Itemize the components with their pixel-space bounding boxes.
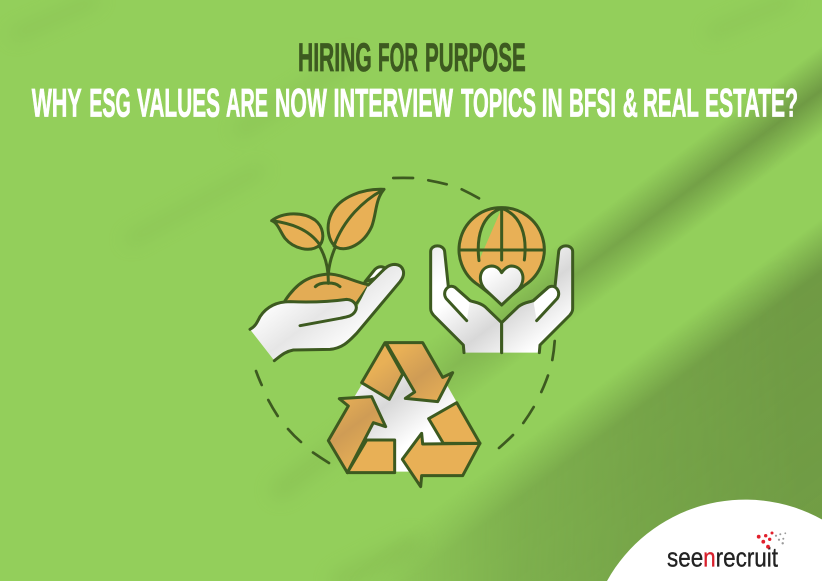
left hand: [431, 246, 502, 353]
title line 2: BFSI: [569, 82, 616, 126]
globe: [459, 208, 544, 303]
title line 1: PURPOSE: [425, 36, 526, 80]
title line 2: ARE: [226, 82, 268, 126]
right arrow tail: [429, 403, 480, 443]
title line 2: &: [623, 82, 638, 126]
open hand: [250, 264, 404, 361]
right hand: [502, 246, 573, 353]
top arrow: [386, 343, 453, 402]
dashed circle: [256, 178, 555, 463]
title line 2: REAL: [643, 82, 699, 126]
logo badge: [607, 500, 822, 581]
white backing: [328, 343, 480, 472]
left arrow tail: [347, 440, 395, 473]
title line 2: WHY: [32, 82, 82, 126]
logo wordmark: seenrecruit: [667, 542, 778, 572]
icon: hand holding sprout: [250, 189, 404, 361]
background: [350, 53, 822, 581]
back finger: [365, 267, 385, 282]
top arrow tail: [362, 343, 403, 399]
soil mound: [285, 274, 369, 303]
heart: [480, 266, 523, 305]
title line 1: [298, 36, 526, 80]
left arrow: [328, 397, 386, 473]
left thumb: [445, 286, 470, 321]
left leaf: [272, 214, 323, 249]
icon: recycling symbol: [328, 343, 480, 487]
title line 2: IN: [542, 82, 563, 126]
right thumb: [533, 286, 559, 321]
right arrow: [402, 433, 480, 487]
title line 2: INTERVIEW: [334, 82, 453, 126]
sprout stem: [315, 245, 340, 287]
title line 2: NOW: [275, 82, 327, 126]
title line 1: FOR: [378, 36, 418, 80]
logo dots: [757, 532, 786, 549]
right leaf: [328, 189, 384, 249]
title line 2: VALUES: [137, 82, 220, 126]
title line 2: TOPICS: [461, 82, 536, 126]
title line 2: ESG: [89, 82, 131, 126]
title line 2: [32, 82, 798, 126]
icon: hands holding globe and heart: [431, 208, 573, 353]
title line 1: HIRING: [298, 36, 372, 80]
